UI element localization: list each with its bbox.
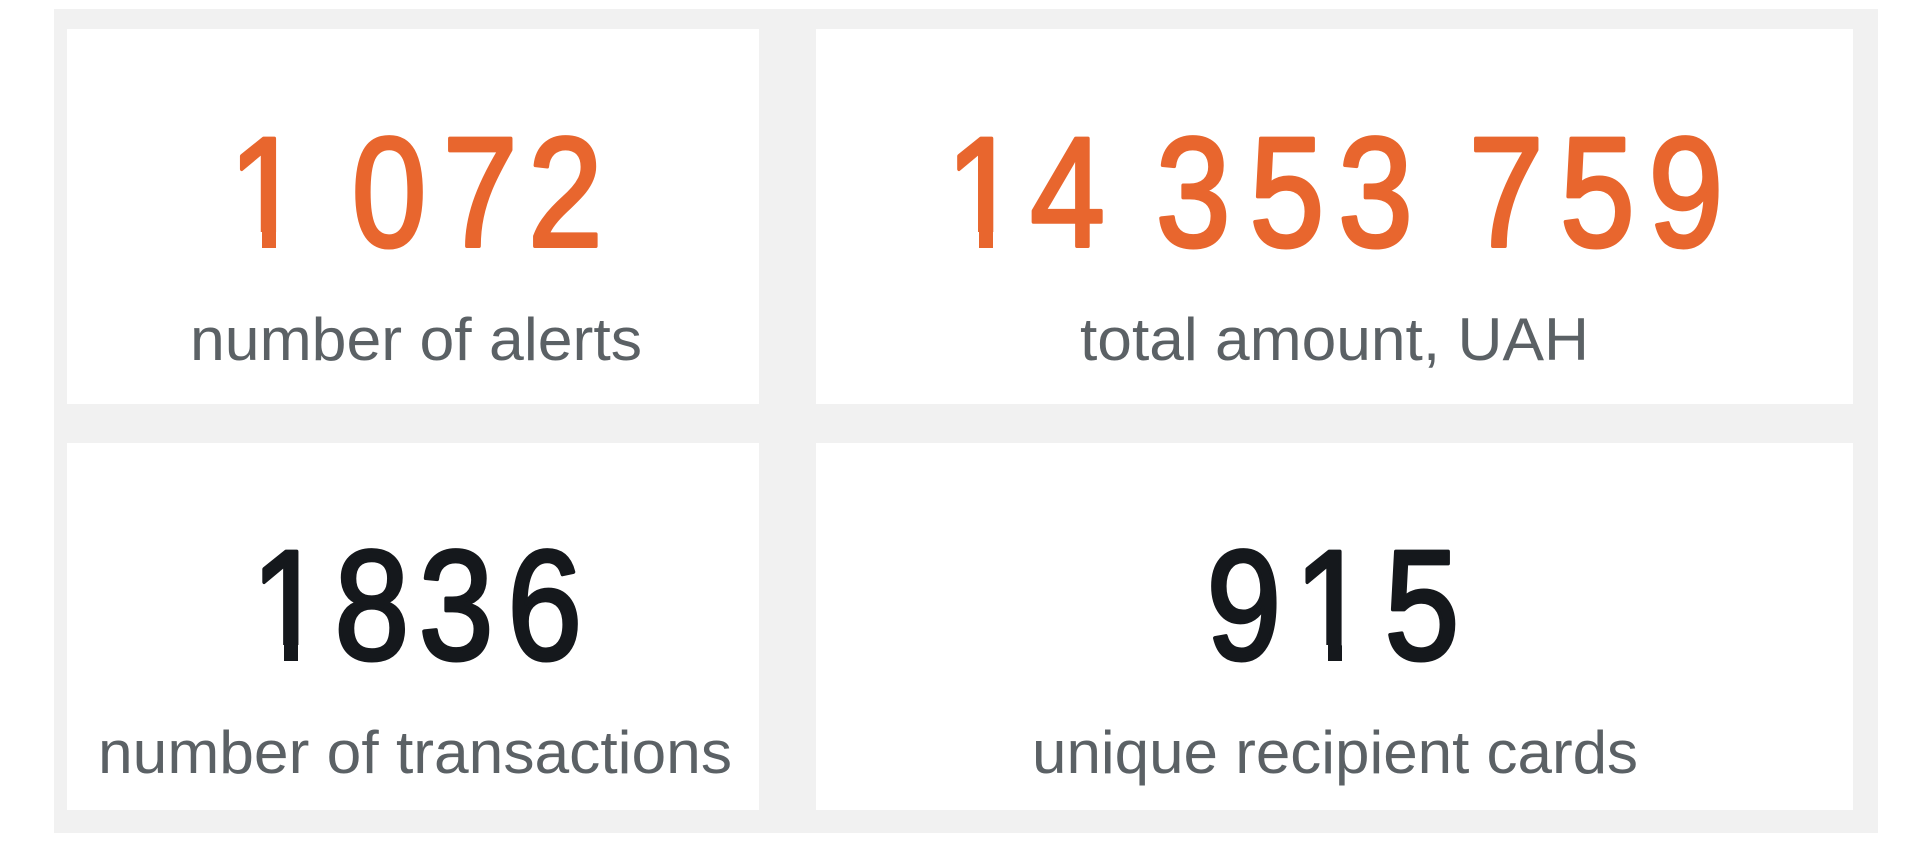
label: total amount, UAH: total amount, UAH	[1080, 306, 1589, 373]
label: unique recipient cards: unique recipient cards	[1032, 719, 1638, 786]
card: unique recipient cards	[816, 443, 1853, 810]
number: unique cards count: 915	[1207, 517, 1459, 692]
number: alerts count: 1 072	[229, 104, 603, 279]
number: total amount value: 14 353 759	[946, 104, 1723, 279]
label: number of transactions: number of transactions	[98, 719, 732, 786]
card: number of transactions	[67, 443, 759, 810]
number: transactions count: 1836	[251, 517, 582, 692]
card: total amount	[816, 29, 1853, 404]
label: number of alerts: number of alerts	[190, 306, 642, 373]
card: number of alerts	[67, 29, 759, 404]
